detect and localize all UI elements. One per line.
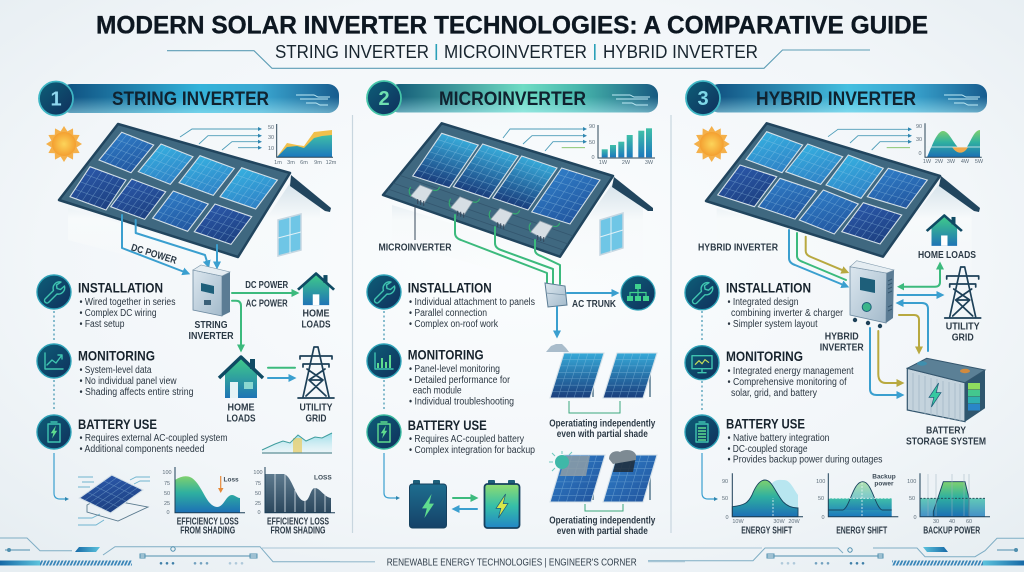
- label: home loads: HOME: [302, 308, 330, 320]
- bar chart: [589, 124, 655, 166]
- dotted connector: [53, 311, 55, 411]
- chart: efficiency loss 2: 100: [253, 470, 263, 476]
- energy chart: [916, 123, 984, 165]
- section: battery use: BATTERY USE: [408, 417, 487, 433]
- chart: backup power: 30: [933, 519, 939, 525]
- area chart: 9m: [314, 160, 322, 166]
- area chart: 50: [268, 125, 274, 131]
- section: installation: • Complex DC wiring: [80, 308, 156, 319]
- label: home loads: HOME: [228, 402, 255, 414]
- icon: utility tower: [298, 347, 334, 398]
- icon: home loads large: [219, 357, 263, 398]
- icon: battery: [685, 415, 719, 449]
- footer circuit left: [0, 538, 375, 566]
- icon: line chart: [37, 344, 71, 378]
- footer circuit right: [648, 538, 1024, 566]
- subtitle: STRING INVERTER: [275, 41, 429, 62]
- label: string inverter: INVERTER: [188, 331, 234, 342]
- AC combiner box: [545, 283, 567, 307]
- section: monitoring: MONITORING: [726, 348, 803, 364]
- icon: battery: [367, 415, 401, 449]
- section: monitoring: solar, grid, and battery: [731, 388, 817, 399]
- bar chart: 0: [591, 155, 595, 161]
- panel: microinverter: [367, 81, 658, 537]
- label: home loads: [226, 402, 256, 424]
- roof with house: [706, 123, 980, 285]
- chart: efficiency loss 2: 50: [255, 491, 261, 497]
- section: monitoring: • Detailed performance for: [409, 375, 511, 386]
- chart: energy shift 1: 0: [725, 515, 729, 521]
- section: installation: [367, 275, 535, 330]
- panel: string inverter: [37, 82, 339, 536]
- section: battery use: • Additional components needed: [80, 444, 204, 455]
- section: battery use: • Provides backup power during outages: [728, 454, 882, 466]
- footer text: RENEWABLE ENERGY TECHNOLOGIES | ENGINEER'S CORNER: [387, 556, 637, 568]
- area chart: 3m: [287, 160, 295, 166]
- chart: efficiency loss 1: [162, 467, 245, 516]
- energy chart: 0: [918, 151, 922, 157]
- data leader lines: [180, 129, 260, 150]
- section: installation: • Fast setup: [80, 319, 125, 330]
- chart: efficiency loss 1: 0: [166, 510, 170, 516]
- label: DC power output: DC POWER: [245, 280, 289, 291]
- area chart: 1m: [274, 160, 282, 166]
- section: battery use: • Requires external AC-coupled system: [80, 433, 228, 444]
- section: monitoring: [37, 344, 194, 398]
- solar panels: [718, 132, 927, 244]
- label: microinverter: MICROINVERTER: [378, 242, 452, 254]
- section: installation: combining inverter & charger: [731, 308, 844, 319]
- bar chart: 90: [589, 124, 595, 130]
- label: AC power output: AC POWER: [246, 298, 288, 310]
- AC trunk arrow: [567, 292, 616, 294]
- section: monitoring: MONITORING: [408, 346, 484, 362]
- caption 1: [549, 418, 656, 440]
- arrow to charts: [702, 453, 716, 499]
- icon: bars: [367, 344, 401, 378]
- power flow arrows: [870, 265, 941, 395]
- energy chart: 5W: [975, 159, 984, 165]
- label: utility grid: GRID: [952, 332, 974, 344]
- label: hybrid inverter roof: HYBRID INVERTER: [698, 242, 779, 254]
- chart: backup power: [907, 473, 990, 525]
- area chart: 12m: [326, 160, 337, 166]
- icon: wrench: [685, 276, 719, 310]
- label: efficiency loss 1: EFFICIENCY LOSS: [177, 516, 239, 528]
- section: monitoring: each module: [413, 386, 462, 396]
- caption 2: Operatiating independently: [549, 516, 656, 526]
- section: monitoring: [685, 346, 854, 399]
- dotted connector: [701, 311, 703, 411]
- section: installation: INSTALLATION: [78, 279, 163, 295]
- caption 2: even with partial shade: [557, 526, 648, 537]
- label: utility grid: UTILITY: [946, 322, 980, 332]
- label: home loads: [302, 308, 331, 330]
- label: home loads: LOADS: [302, 320, 331, 330]
- section: installation: • Simpler system layout: [728, 319, 818, 330]
- arrow to batteries: [384, 453, 398, 498]
- label: efficiency loss 2: FROM SHADING: [270, 526, 326, 536]
- section: monitoring: MONITORING: [78, 348, 155, 364]
- energy chart: 90: [916, 124, 922, 130]
- label: battery storage system: STORAGE SYSTEM: [906, 436, 986, 448]
- icon: cloud: [546, 344, 569, 352]
- icon: sun: [694, 126, 730, 162]
- chart: energy shift 1: [722, 473, 803, 525]
- data leader lines: [828, 129, 910, 150]
- chart: efficiency loss 1: Loss: [224, 476, 239, 484]
- chart: backup power: 50: [909, 496, 915, 502]
- label: microinverter: [378, 205, 452, 254]
- energy chart: 4W: [961, 159, 970, 165]
- header: hybrid inverter: 3: [697, 88, 709, 110]
- section: monitoring: • Shading affects entire string: [80, 387, 194, 398]
- chart: efficiency loss 2: 25: [255, 501, 261, 507]
- header: hybrid inverter: HYBRID INVERTER: [756, 89, 916, 110]
- section: battery use: • DC-coupled storage: [728, 444, 808, 455]
- section: installation: [37, 275, 176, 330]
- bar chart: 3W: [645, 160, 654, 166]
- label: battery storage system: [906, 426, 986, 448]
- header: hybrid inverter: [686, 81, 987, 115]
- chart: efficiency loss 2: LOSS: [314, 474, 332, 482]
- icon: panel with wiring: [78, 475, 150, 525]
- label: string inverter: STRING: [194, 320, 228, 331]
- section: battery use: [685, 415, 882, 466]
- title: MODERN SOLAR INVERTER TECHNOLOGIES: A COMPARATIVE GUIDE: [96, 12, 928, 40]
- icon: dark cloud: [609, 450, 636, 464]
- label: energy shift 2: ENERGY SHIFT: [836, 526, 887, 536]
- bar chart: 1W: [599, 160, 608, 166]
- icon: wrench: [367, 275, 401, 309]
- section: installation: • Individual attachment to panels: [409, 297, 535, 308]
- section: monitoring: [367, 344, 514, 408]
- footer rule: [262, 548, 762, 562]
- label: efficiency loss 1: FROM SHADING: [180, 526, 235, 536]
- subtitle: MICROINVERTER: [444, 41, 587, 62]
- section: battery use: • Requires AC-coupled battery: [409, 434, 524, 445]
- AC cables: [455, 215, 560, 284]
- chart: efficiency loss 2: [253, 467, 335, 516]
- chart: backup power: 40: [949, 519, 955, 525]
- header: microinverter: 2: [378, 88, 390, 110]
- icon: battery: [37, 415, 71, 449]
- chart: energy shift 1: 50: [722, 496, 728, 502]
- roof with house: [59, 124, 331, 285]
- section: monitoring: • System-level data: [80, 365, 152, 376]
- string inverter unit: [193, 265, 230, 316]
- label: utility grid: [300, 402, 333, 424]
- area chart: 30: [268, 135, 274, 141]
- label: hybrid inverter: INVERTER: [820, 342, 864, 354]
- caption 1: even with partial shade: [557, 429, 648, 440]
- energy chart: 2W: [935, 159, 944, 165]
- AC wires: [232, 293, 296, 349]
- header: microinverter: [367, 81, 658, 115]
- section: installation: [685, 276, 844, 330]
- section: battery use: [367, 415, 535, 456]
- section: monitoring: • Comprehensive monitoring of: [728, 377, 847, 388]
- icon: sun: [46, 126, 82, 162]
- chart: energy shift 2: [816, 473, 898, 521]
- label: efficiency loss 2: [267, 516, 329, 536]
- area chart: 6m: [300, 160, 308, 166]
- dotted connector: [383, 311, 385, 411]
- icon: home loads small: [298, 274, 334, 305]
- header: string inverter: 1: [50, 88, 62, 110]
- header: string inverter: [39, 82, 339, 116]
- section: monitoring: • Panel-level monitoring: [409, 364, 500, 375]
- chart: energy shift 1: 10W: [732, 519, 744, 525]
- subtitle underline: [167, 50, 870, 68]
- arrow to module: [54, 453, 67, 499]
- section: installation: • Complex on-roof work: [409, 319, 499, 330]
- chart: energy shift 2: Backup: [872, 474, 896, 480]
- section: monitoring: • No individual panel view: [80, 376, 177, 387]
- energy chart: 3W: [947, 159, 956, 165]
- chart: energy shift 2: 0: [821, 515, 825, 521]
- solar wires: [789, 230, 846, 286]
- label: utility grid: GRID: [306, 414, 326, 424]
- caption 2: [549, 516, 656, 537]
- section: installation: • Integrated design: [728, 297, 798, 308]
- icon: battery left: [410, 480, 446, 528]
- bar chart: 2W: [622, 160, 631, 166]
- label: DC power: DC POWER: [130, 242, 178, 267]
- hybrid inverter unit: [850, 261, 894, 328]
- arrows between batteries: [453, 498, 477, 509]
- label: home loads: HOME LOADS: [918, 250, 976, 261]
- energy chart: 1W: [923, 159, 932, 165]
- chart: efficiency loss 1: 50: [164, 491, 170, 497]
- label: utility grid: UTILITY: [300, 402, 333, 414]
- chart: efficiency loss 1: 75: [164, 481, 170, 487]
- microinverter units: [409, 185, 560, 242]
- section: installation: • Wired together in series: [80, 297, 176, 308]
- chart: energy shift 2: 100: [816, 479, 825, 485]
- chart: efficiency loss 2: 0: [257, 510, 261, 516]
- icon: small sun: [549, 451, 572, 471]
- roof with house: [383, 123, 653, 290]
- icon: utility tower: [945, 267, 981, 318]
- chart: energy shift 2: power: [874, 480, 894, 488]
- chart: energy shift 1: 20W: [788, 519, 800, 525]
- chart: energy shift 1: 30W: [773, 519, 785, 525]
- label: efficiency loss 2: EFFICIENCY LOSS: [267, 516, 329, 528]
- section: monitoring: • Individual troubleshooting: [409, 396, 514, 408]
- section: monitoring: • Integrated energy management: [728, 366, 854, 377]
- icon: monitor: [685, 346, 719, 380]
- chart: efficiency loss 1: 100: [162, 470, 172, 476]
- solar panels: [413, 133, 600, 224]
- section: battery use: • Native battery integration: [728, 433, 830, 444]
- chart: efficiency loss 1: 25: [164, 501, 170, 507]
- chart: efficiency loss 2: 75: [255, 481, 261, 487]
- icon: home loads: [927, 215, 962, 246]
- label: hybrid inverter: HYBRID: [825, 332, 859, 342]
- subtitle: HYBRID INVERTER: [603, 41, 758, 62]
- data leader lines: [503, 129, 585, 151]
- ground panels unshaded: [550, 353, 657, 413]
- label: home loads: LOADS: [226, 414, 256, 424]
- label: battery storage system: BATTERY: [926, 426, 966, 436]
- chart: backup power: 60: [966, 519, 972, 525]
- section: battery use: [37, 415, 228, 455]
- chart: backup power: 100: [907, 479, 916, 485]
- header: microinverter: MICROINVERTER: [439, 89, 586, 110]
- subtitle: [275, 41, 758, 62]
- battery storage unit: [907, 358, 985, 422]
- icon: network: [621, 276, 655, 310]
- label: energy shift 1: ENERGY SHIFT: [741, 526, 792, 536]
- ground panels shaded: [550, 455, 657, 511]
- header: string inverter: STRING INVERTER: [112, 89, 269, 110]
- section: installation: INSTALLATION: [726, 279, 811, 295]
- bar chart: 50: [589, 140, 595, 146]
- DC wires to inverter: [122, 215, 217, 273]
- output arrow down: [556, 307, 558, 335]
- chart: energy shift 2: 50: [818, 496, 824, 502]
- panel: hybrid inverter: [685, 81, 990, 536]
- label: string inverter: [188, 320, 234, 342]
- section: installation: INSTALLATION: [408, 279, 492, 295]
- energy chart: 30: [916, 137, 922, 143]
- chart: backup power: 0: [913, 515, 917, 521]
- section: battery use: BATTERY USE: [78, 416, 157, 432]
- label: backup power: BACKUP POWER: [923, 526, 981, 536]
- label: utility grid: [946, 322, 980, 344]
- section: installation: • Parallel connection: [409, 308, 487, 319]
- label: hybrid inverter: [820, 332, 864, 354]
- panel dividers: [352, 115, 671, 533]
- area chart: 10: [268, 146, 274, 152]
- caption 1: Operatiating independently: [549, 418, 656, 430]
- solar panels: [70, 132, 277, 244]
- grid arrows: [268, 368, 295, 378]
- label: efficiency loss 1: [177, 516, 239, 536]
- icon: wrench: [37, 275, 71, 309]
- section: battery use: BATTERY USE: [726, 416, 805, 432]
- label: AC trunk: AC TRUNK: [572, 299, 617, 310]
- area chart: [268, 124, 337, 166]
- chart: energy shift 1: 90: [722, 479, 728, 485]
- section: battery use: • Complex integration for backup: [409, 445, 535, 456]
- footer: [0, 538, 1024, 568]
- icon: battery right: [484, 480, 520, 528]
- sparkline: [262, 433, 332, 453]
